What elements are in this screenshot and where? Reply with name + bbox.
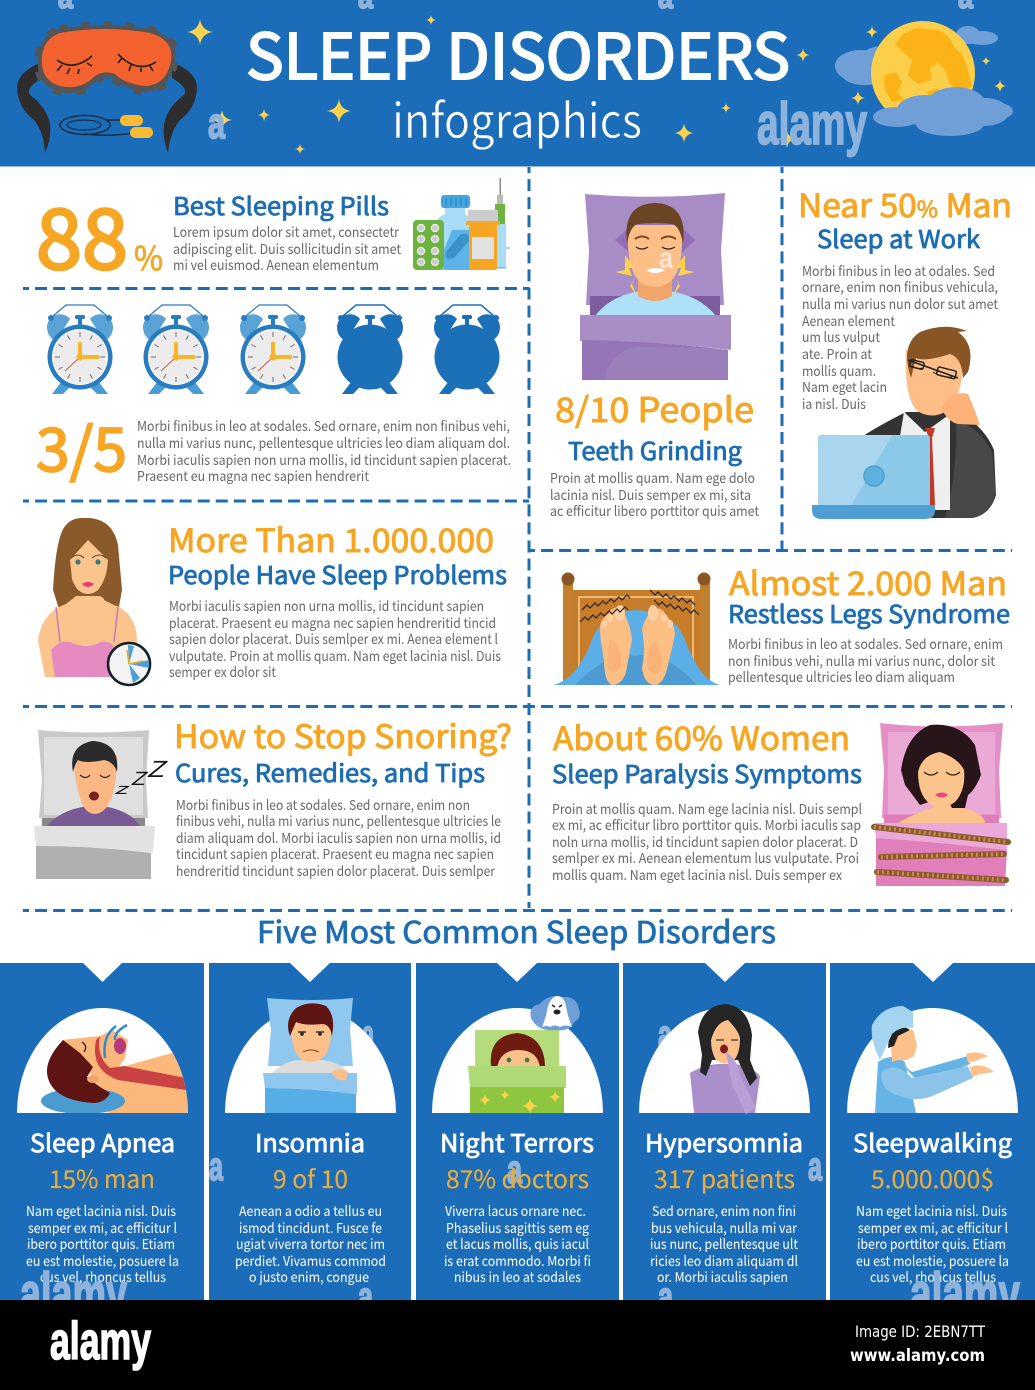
text block: semlper ex mi. Aenean elementum lus vulputate. Proi [552, 847, 859, 867]
text block: semper ex mi, ac efficitur l [858, 1217, 1008, 1237]
text block: Proin at mollis quam. Nam ege lacinia nisl. Duis sempl [552, 798, 862, 818]
icon: pills and bottles [413, 178, 510, 270]
text block: lacinia nisl. Duis semper ex mi, sita [550, 484, 751, 504]
panel: footer bar [0, 1300, 1035, 1390]
arch [432, 1008, 603, 1113]
text block [550, 467, 759, 520]
text block: Morbi finibus in leo at sodales. Sed ornare, enim non [176, 794, 470, 814]
bottom watermarks: alamy [20, 1261, 127, 1327]
text block: Aenean a odio a tellus eu [239, 1200, 382, 1220]
text block: um lus vulput [802, 326, 880, 346]
text block: et lacus mollis, quis iacul [446, 1233, 589, 1253]
icon: sleep apnea airway [41, 1025, 190, 1114]
text block [650, 1200, 798, 1286]
heading: Sleepwalking [853, 1125, 1012, 1160]
panel: more than 1.000.000 [38, 516, 507, 685]
title: SLEEP DISORDERS [246, 7, 790, 98]
arch [17, 1008, 188, 1113]
text block: ex mi, ac efficitur libro porttitor quis. Morbi iaculis sap [552, 814, 861, 834]
text block: non finibus vehi, nulla mi varius nunc, dolor sit [728, 650, 995, 670]
heading: Hypersomnia [645, 1125, 803, 1160]
panel: night terrors card [416, 963, 619, 1300]
thought cloud with ghost [530, 996, 580, 1030]
text block: or. Morbi iaculis sapien [657, 1266, 788, 1286]
text block: mollis quam. [802, 360, 876, 380]
dashed dividers [23, 167, 1012, 910]
icon: moon and clouds [835, 21, 1013, 136]
icon: sleepwalking man [872, 1006, 994, 1113]
watermark letters: a [362, 1013, 374, 1057]
text block: o justo enim, congue [249, 1266, 369, 1286]
text block: diam aliquam dol. Morbi iaculis sapien non urna mollis, id [176, 827, 501, 847]
watermark: alamy [757, 91, 867, 157]
icon: businessman asleep at laptop [812, 327, 996, 519]
subtitle: infographics [392, 82, 642, 152]
stat: 88%: 88 [36, 173, 128, 293]
watermark: a [208, 99, 225, 148]
card background with notch [416, 963, 619, 1300]
text block: ugiat viverra tortor nec im [236, 1233, 385, 1253]
text block [176, 794, 501, 880]
text block: vulputate. Proin at mollis quam. Nam eget lacinia nisl. Duis [169, 645, 501, 665]
icon: woman tied to bed with ropes [874, 723, 1008, 886]
icon: bed with restless feet [553, 572, 720, 685]
icon: alarm clock 2 [143, 305, 209, 394]
text block: cus vel, rhoncus tellus [40, 1266, 166, 1286]
watermark [58, 0, 974, 157]
icon: yawning woman [690, 1004, 760, 1114]
subheading: Teeth Grinding [568, 433, 742, 468]
text block: finibus vehi, nulla mi varius nunc, pellentesque ultricies le [176, 810, 501, 830]
card background with notch [0, 963, 204, 1300]
arch [639, 1008, 810, 1113]
icon: alarm clock 1 [47, 305, 113, 394]
text block: Phaselius sagittis sem eg [446, 1217, 589, 1237]
icon: insomnia man in bed [263, 998, 357, 1113]
heading: Best Sleeping Pills [173, 188, 389, 223]
snore letters: Z [130, 765, 149, 791]
panel: header banner [0, 0, 1035, 166]
text block: is erat commodo. Morbi fi [444, 1250, 591, 1270]
watermark letters: a [209, 1145, 223, 1189]
subheading: People Have Sleep Problems [168, 557, 507, 592]
heading: Sleep Apnea [30, 1125, 175, 1160]
text block [235, 1200, 386, 1286]
heading: More Than 1.000.000 [168, 516, 494, 562]
stat: 3/5: 3/5 [36, 402, 127, 489]
watermark letter: a [507, 1148, 523, 1192]
text block [26, 1200, 179, 1286]
text block: Nam eget lacinia nisl. Duis [26, 1200, 176, 1220]
heading: 8/10 People [555, 383, 754, 432]
icon: tired woman with clock [38, 518, 150, 685]
text block [856, 1200, 1009, 1286]
text block: Lorem ipsum dolor sit amet, consectetr [173, 221, 400, 241]
icon: child hiding under blanket with ghost [468, 996, 580, 1114]
text block: Viverra lacus ornare nec. [445, 1200, 586, 1220]
text block: Morbi finibus in leo at odales. Sed [802, 260, 995, 280]
card background with notch [623, 963, 826, 1300]
text block: hendreritid tincidunt sapien dolor placerat. Duis semlper [176, 860, 496, 880]
icon: alarm clock silhouette 4 [337, 305, 403, 394]
stat: 88%: % [134, 232, 163, 280]
text block: mollis quam. Nam eget lacinia nisl. Duis semper ex [552, 864, 842, 884]
text block: Nam eget lacin [802, 376, 887, 396]
heading: How to Stop Snoring? [174, 712, 512, 758]
icon: stars [187, 15, 1006, 154]
watermark letters: a [658, 1013, 672, 1057]
text block [137, 415, 511, 485]
icon: sleep mask with earplugs [17, 28, 197, 153]
card background with notch [830, 963, 1035, 1300]
text block: Morbi iaculis sapien non urna mollis, id tincidunt sapien placerat. [137, 449, 511, 469]
panel: teeth grinding [550, 193, 759, 520]
text block: ornare, enim non finibus vehicula, [802, 276, 998, 296]
stat: 317 patients [654, 1161, 795, 1196]
text block: eu est molestie, posuere la [26, 1250, 179, 1270]
text block: bus vehicula, nulla mi var [651, 1217, 798, 1237]
text block: mi vel euismod. Aenean elementum [173, 254, 379, 274]
subheading: Cures, Remedies, and Tips [175, 755, 485, 790]
subheading: Sleep at Work [817, 221, 980, 256]
ropes [874, 827, 1008, 880]
text block: sapien dolor placerat. Duis semlper ex mi. Aenea element l [169, 628, 498, 648]
panel: sleepwalking card [830, 963, 1035, 1300]
snore letters: Z [146, 752, 169, 784]
text block: semper ex mi, ac efficitur l [28, 1217, 177, 1237]
panel: best sleeping pills [36, 173, 510, 293]
panel: sleep paralysis [552, 714, 1008, 886]
watermark letters [209, 1013, 374, 1319]
heading: Almost 2.000 Man [729, 559, 1007, 605]
subheading: Restless Legs Syndrome [728, 596, 1010, 631]
logo: alamy [50, 1312, 151, 1371]
heading: Insomnia [255, 1125, 365, 1160]
text block: ius nunc, pellentesque ult [650, 1233, 798, 1253]
panel: how to stop snoring [34, 712, 512, 880]
panel: restless legs syndrome [553, 559, 1010, 686]
image id: Image ID: 2EBN7TT [855, 1322, 985, 1341]
panel: sleep at work [798, 181, 1012, 519]
snore letters [114, 752, 169, 799]
text block: tincidunt sapien placerat. Praesent eu magna nec sapien [176, 843, 494, 863]
text block: ricies leo diam aliquam dl [650, 1250, 798, 1270]
text block: eu est molestie, posuere la [856, 1250, 1009, 1270]
panel: hypersomnia card [623, 963, 826, 1319]
icon: snoring man in bed [34, 730, 169, 879]
text block: ibero porttitor quis. Etiam [27, 1233, 175, 1253]
text block: ismod tincidunt. Fusce fe [239, 1217, 382, 1237]
website: www.alamy.com [850, 1346, 985, 1366]
text block [444, 1200, 591, 1286]
watermark letters: a [658, 1275, 674, 1319]
watermark letters: a [358, 1275, 374, 1319]
text block [552, 798, 862, 884]
text block: Praesent eu magna nec sapien hendrerit [137, 465, 369, 485]
text block: noln urna mollis, id tincidunt sapien dolor placerat. D [552, 831, 858, 851]
subheading: Sleep Paralysis Symptoms [552, 756, 862, 791]
arch [847, 1008, 1018, 1113]
icon: man grinding teeth in bed [580, 193, 731, 380]
stat: 87% doctors [446, 1161, 589, 1196]
text block: adipiscing elit. Duis sollicitudin sit amet [173, 238, 401, 258]
stat: 15% man [49, 1161, 155, 1196]
panel: alarm clocks 3/5 [36, 305, 511, 489]
text block: Proin at mollis quam. Nam ege dolo [550, 467, 755, 487]
text block: Morbi iaculis sapien non urna mollis, id tincidunt sapien [169, 595, 484, 615]
arch [225, 1008, 396, 1113]
text block [169, 595, 501, 681]
icon: man grinding teeth in bed: a [659, 242, 673, 275]
text block: ibero porttitor quis. Etiam [857, 1233, 1006, 1253]
heading: About 60% Women [553, 714, 850, 760]
stat: 5.000.000$ [871, 1161, 994, 1196]
icon: alarm clock 3 [240, 305, 306, 394]
watermark letters: a [808, 1145, 822, 1189]
text block: perdiet. Vivamus commod [235, 1250, 386, 1270]
text block [728, 633, 1003, 686]
heading: Night Terrors [440, 1125, 594, 1160]
text block: nulla mi varius nun dolor sut amet [802, 293, 998, 313]
text block [802, 260, 998, 413]
card background with notch [209, 963, 411, 1300]
text block: pellentesque ultricies leo diam aliquam [728, 666, 955, 686]
text block: nulla mi varius nunc, pellentesque ultricies leo diam aliquam dol. [137, 432, 510, 452]
watermark letters [658, 1013, 822, 1319]
text block: Morbi finibus in leo at sodales. Sed ornare, enim [728, 633, 1003, 653]
text block: semper ex dolor sit [169, 661, 276, 681]
snore letters: z [114, 778, 130, 799]
text block: nibus in leo at sodales [454, 1266, 581, 1286]
bottom watermarks [20, 1261, 1020, 1327]
section heading: Five Most Common Sleep Disorders [257, 908, 776, 952]
text block: Sed ornare, enim non fini [652, 1200, 796, 1220]
panel: sleep apnea card [0, 963, 204, 1300]
panel: insomnia card [209, 963, 411, 1319]
text block: Morbi finibus in leo at sodales. Sed ornare, enim non finibus vehi, [137, 415, 510, 435]
text block: ia nisl. Duis [802, 393, 866, 413]
stat: 9 of 10 [273, 1161, 348, 1196]
icon: alarm clock silhouette 5 [434, 305, 500, 394]
text block: ate. Proin at [802, 343, 872, 363]
heading: Near 50% Man [798, 181, 1012, 227]
text block [173, 221, 401, 274]
text block: cus vel, rhoncus tellus [870, 1266, 996, 1286]
text block: ac efficitur libero porttitor quis amet [550, 500, 759, 520]
text block: Nam eget lacinia nisl. Duis [856, 1200, 1007, 1220]
text block: Aenean element [802, 310, 895, 330]
text block: placerat. Praesent eu magna nec sapien hendreritid tincid [169, 612, 496, 632]
